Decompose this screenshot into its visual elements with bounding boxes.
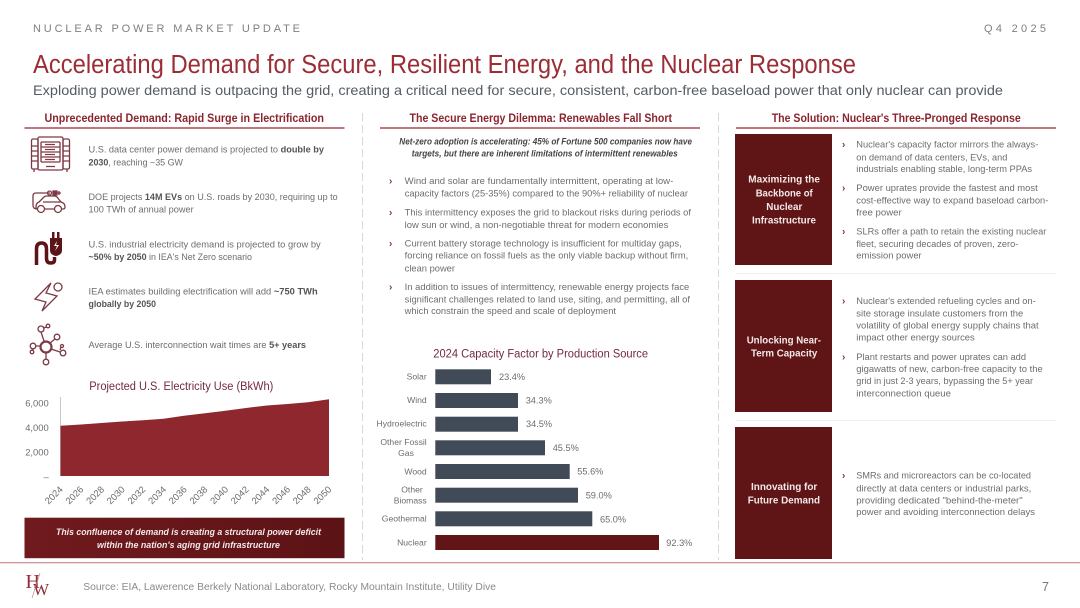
bullets: unlocking capacity: › bbox=[842, 296, 845, 307]
bullets: unlocking capacity: grid in just 2-3 years, bypassing the 5+ year bbox=[856, 376, 1033, 386]
text: industrial demand: U.S. industrial electricity demand is projected to grow by bbox=[88, 239, 321, 249]
bullets: maximizing the backbone: Nuclear's capacity factor mirrors the always- bbox=[856, 140, 1038, 150]
chart title: Projected U.S. Electricity Use (BkWh) bbox=[89, 381, 273, 393]
column heading: solution: The Solution: Nuclear's Three-Pronged Response bbox=[772, 113, 1021, 125]
bullets: unlocking capacity: gigawatts of new, carbon-free capacity to the bbox=[856, 364, 1043, 374]
panel: secure energy dilemma bbox=[377, 113, 700, 550]
bullets: maximizing the backbone: SLRs offer a path to retain the existing nuclear bbox=[856, 227, 1046, 237]
x axis labels: 2044 bbox=[249, 484, 271, 506]
value labels: 92.3% bbox=[666, 538, 692, 548]
panel: unprecedented demand bbox=[24, 113, 344, 558]
chart: capacity factor by source bbox=[377, 348, 692, 550]
bullets: innovating for future demand: providing dedicated "behind-the-meter" bbox=[856, 495, 1023, 505]
text: building electrification bbox=[88, 287, 318, 309]
bullets: limitations of renewables: capacity factors (25-35%) compared to the 90%+ reliability of nuclear bbox=[405, 189, 688, 199]
x axis labels: 2046 bbox=[270, 484, 292, 506]
bullets: limitations of renewables: › bbox=[389, 282, 392, 293]
value labels: 34.5% bbox=[526, 419, 552, 429]
prong box: unlocking capacity: Unlocking Near- bbox=[747, 335, 821, 346]
prong box: unlocking capacity: Term Capacity bbox=[751, 349, 818, 360]
bullets: unlocking capacity: volatility of global energy supply chains that bbox=[856, 321, 1039, 331]
y axis labels: – bbox=[43, 471, 49, 482]
x axis labels: 2034 bbox=[146, 484, 168, 506]
bullets: innovating for future demand: › bbox=[842, 471, 845, 482]
source note: Source: EIA, Lawerence Berkely National Laboratory, Rocky Mountain Institute, Utility Dive bbox=[83, 582, 496, 593]
subtitle: Exploding power demand is outpacing the grid, creating a critical need for secure, consistent, carbon-free baseload power that only nuclear can provide bbox=[33, 82, 1003, 98]
y axis labels: 2,000 bbox=[25, 446, 49, 458]
bullets: maximizing the backbone: industrials enabling stable, long-term PPAs bbox=[856, 164, 1032, 174]
bullets: limitations of renewables: forcing reliance on fossil fuels as the only viable backup without firm, bbox=[405, 251, 688, 261]
icon: industrial power plug bbox=[36, 232, 62, 265]
bullets: limitations of renewables: › bbox=[389, 207, 392, 218]
bullets: limitations of renewables: clean power bbox=[405, 263, 455, 273]
bars bbox=[435, 369, 659, 550]
bullets: maximizing the backbone: fleet, securing decades of proven, zero- bbox=[856, 239, 1018, 249]
category labels: Other bbox=[401, 485, 423, 495]
y axis labels: 6,000 bbox=[25, 398, 49, 408]
logo: HW monogram: H bbox=[26, 571, 40, 593]
bullets: maximizing the backbone: › bbox=[842, 140, 845, 151]
x axis labels: 2040 bbox=[208, 484, 230, 506]
category labels: Wind bbox=[407, 395, 427, 405]
value labels: 65.0% bbox=[600, 515, 626, 525]
bullets: limitations of renewables: significant challenges related to land use, siting, and permitting, all of bbox=[405, 295, 690, 305]
value labels bbox=[499, 372, 692, 548]
x axis labels: 2042 bbox=[228, 484, 251, 506]
bullets: unlocking capacity bbox=[842, 296, 1043, 398]
bullets: unlocking capacity: impact other energy sources bbox=[856, 333, 975, 343]
bullets: limitations of renewables: › bbox=[389, 239, 392, 250]
bullets: maximizing the backbone: cost-effective way to expand baseload carbon- bbox=[856, 196, 1048, 206]
category labels: Biomass bbox=[394, 496, 427, 506]
area series bbox=[60, 399, 329, 476]
category labels: Other Fossil bbox=[380, 437, 427, 447]
bullets: limitations of renewables: Wind and solar are fundamentally intermittent, operating at low- bbox=[405, 176, 673, 186]
icon: electric car bbox=[33, 191, 65, 212]
text: industrial demand: ~50% by 2050 in IEA's Net Zero scenario bbox=[88, 252, 252, 262]
prong box: unlocking capacity bbox=[735, 280, 832, 412]
text: EV demand: 100 TWh of annual power bbox=[88, 205, 194, 215]
bullets: limitations of renewables: low sun or wind, a non-negotiable threat for modern economies bbox=[405, 220, 669, 230]
bullets: innovating for future demand: directly at data centers or industrial parks, bbox=[856, 483, 1031, 493]
value labels: 34.3% bbox=[526, 396, 552, 406]
prong box: maximizing the backbone bbox=[735, 134, 832, 265]
icon: interconnection network bbox=[30, 324, 66, 365]
prong box: innovating for future demand: Innovating for bbox=[751, 482, 817, 493]
value labels: 59.0% bbox=[586, 491, 612, 501]
prong box: innovating for future demand bbox=[735, 427, 832, 559]
prong box: maximizing the backbone: Nuclear bbox=[766, 202, 802, 213]
bullets: limitations of renewables: Current battery storage technology is insufficient for multiday gaps, bbox=[405, 239, 682, 249]
bullets: unlocking capacity: site storage insulate customers from the bbox=[856, 309, 1023, 319]
x axis labels: 2032 bbox=[125, 484, 147, 506]
logo: HW monogram bbox=[26, 571, 50, 599]
text: building electrification: globally by 2050 bbox=[88, 299, 156, 309]
bullets: maximizing the backbone: on demand of data centers, EVs, and bbox=[856, 152, 1007, 162]
x axis labels: 2036 bbox=[166, 484, 189, 506]
bullets: limitations of renewables: › bbox=[389, 176, 392, 187]
callout: structural power deficit: within the nation's aging grid infrastructure bbox=[97, 539, 280, 550]
category labels bbox=[377, 371, 427, 547]
value labels: 55.6% bbox=[577, 467, 603, 477]
x axis labels: 2030 bbox=[104, 484, 127, 506]
intro statement bbox=[399, 136, 692, 159]
category labels: Nuclear bbox=[397, 537, 427, 547]
text: data center demand bbox=[88, 145, 325, 167]
bullets: limitations of renewables: This intermittency exposes the grid to blackout risks during periods of bbox=[405, 207, 691, 217]
chart: projected electricity use bbox=[25, 381, 333, 506]
bullets: limitations of renewables: In addition to issues of intermittency, renewable energy projects face bbox=[405, 282, 689, 292]
bullets: unlocking capacity: Nuclear's extended refueling cycles and on- bbox=[856, 296, 1036, 306]
bullets: limitations of renewables: which constrain the speed and scale of deployment bbox=[404, 306, 616, 316]
bullets: maximizing the backbone: Power uprates provide the fastest and most bbox=[856, 183, 1038, 193]
category labels: Geothermal bbox=[382, 514, 427, 524]
bullets: maximizing the backbone bbox=[842, 140, 1048, 261]
icon: lightning bolt and gear bbox=[35, 283, 62, 311]
bullets: limitations of renewables bbox=[389, 176, 691, 316]
logo: HW monogram: W bbox=[33, 580, 50, 599]
panel: the solution bbox=[735, 113, 1056, 559]
category labels: Hydroelectric bbox=[377, 419, 427, 429]
category labels: Wood bbox=[404, 466, 427, 476]
y axis labels bbox=[25, 398, 49, 482]
bullets: innovating for future demand bbox=[842, 471, 1035, 517]
bullets: maximizing the backbone: emission power bbox=[856, 251, 922, 261]
text: data center demand: U.S. data center power demand is projected to double by bbox=[88, 145, 325, 155]
x axis labels bbox=[42, 484, 333, 506]
bullets: maximizing the backbone: › bbox=[842, 183, 845, 194]
text: building electrification: IEA estimates building electrification will add ~750 TWh bbox=[88, 287, 318, 297]
x axis labels: 2048 bbox=[290, 484, 313, 506]
callout: structural power deficit bbox=[24, 518, 344, 558]
x axis labels: 2026 bbox=[63, 484, 85, 506]
category labels: Solar bbox=[407, 371, 427, 381]
prong box: maximizing the backbone: Backbone of bbox=[756, 188, 813, 199]
column heading: dilemma: The Secure Energy Dilemma: Renewables Fall Short bbox=[410, 113, 672, 125]
title: Accelerating Demand for Secure, Resilient Energy, and the Nuclear Response bbox=[33, 51, 856, 79]
category labels: Gas bbox=[398, 448, 414, 458]
value labels: 23.4% bbox=[499, 372, 525, 382]
value labels: 45.5% bbox=[553, 443, 579, 453]
y axis labels: 4,000 bbox=[25, 422, 49, 433]
bullets: innovating for future demand: power and avoiding interconnection delays bbox=[856, 507, 1035, 517]
eyebrow: quarter: Q4 2025 bbox=[984, 23, 1046, 35]
intro statement: Net-zero adoption is accelerating: 45% of Fortune 500 companies now have bbox=[399, 136, 692, 146]
prong box: maximizing the backbone: Maximizing the bbox=[748, 175, 820, 186]
page number: 7 bbox=[1042, 580, 1049, 594]
x axis labels: 2024 bbox=[42, 484, 65, 506]
bullets: maximizing the backbone: free power bbox=[856, 208, 902, 218]
bullets: unlocking capacity: Plant restarts and power uprates can add bbox=[856, 352, 1026, 362]
text: interconnection wait: Average U.S. interconnection wait times are 5+ years bbox=[88, 340, 306, 350]
x axis labels: 2028 bbox=[84, 484, 106, 506]
text: EV demand: DOE projects 14M EVs on U.S. roads by 2030, requiring up to bbox=[88, 192, 338, 202]
bullets: maximizing the backbone: › bbox=[842, 227, 845, 238]
prong box: maximizing the backbone: Infrastructure bbox=[752, 215, 816, 226]
text: industrial demand bbox=[88, 239, 321, 262]
x axis labels: 2038 bbox=[187, 484, 209, 506]
text: EV demand bbox=[88, 192, 338, 215]
eyebrow: report name: NUCLEAR POWER MARKET UPDATE bbox=[33, 23, 300, 35]
icon: data center servers bbox=[32, 137, 70, 172]
text: data center demand: 2030, reaching ~35 GW bbox=[88, 157, 183, 167]
column heading: demand: Unprecedented Demand: Rapid Surge in Electrification bbox=[44, 113, 324, 125]
prong box: innovating for future demand: Future Demand bbox=[748, 495, 820, 506]
bullets: unlocking capacity: interconnection queue bbox=[856, 388, 951, 398]
intro statement: targets, but there are inherent limitations of intermittent renewables bbox=[412, 149, 678, 159]
x axis labels: 2050 bbox=[311, 484, 333, 506]
chart title: 2024 Capacity Factor by Production Source bbox=[433, 348, 648, 360]
bullets: innovating for future demand: SMRs and microreactors can be co-located bbox=[856, 471, 1031, 481]
bullets: unlocking capacity: › bbox=[842, 352, 845, 363]
callout: structural power deficit: This confluence of demand is creating a structural power deficit bbox=[56, 526, 322, 537]
